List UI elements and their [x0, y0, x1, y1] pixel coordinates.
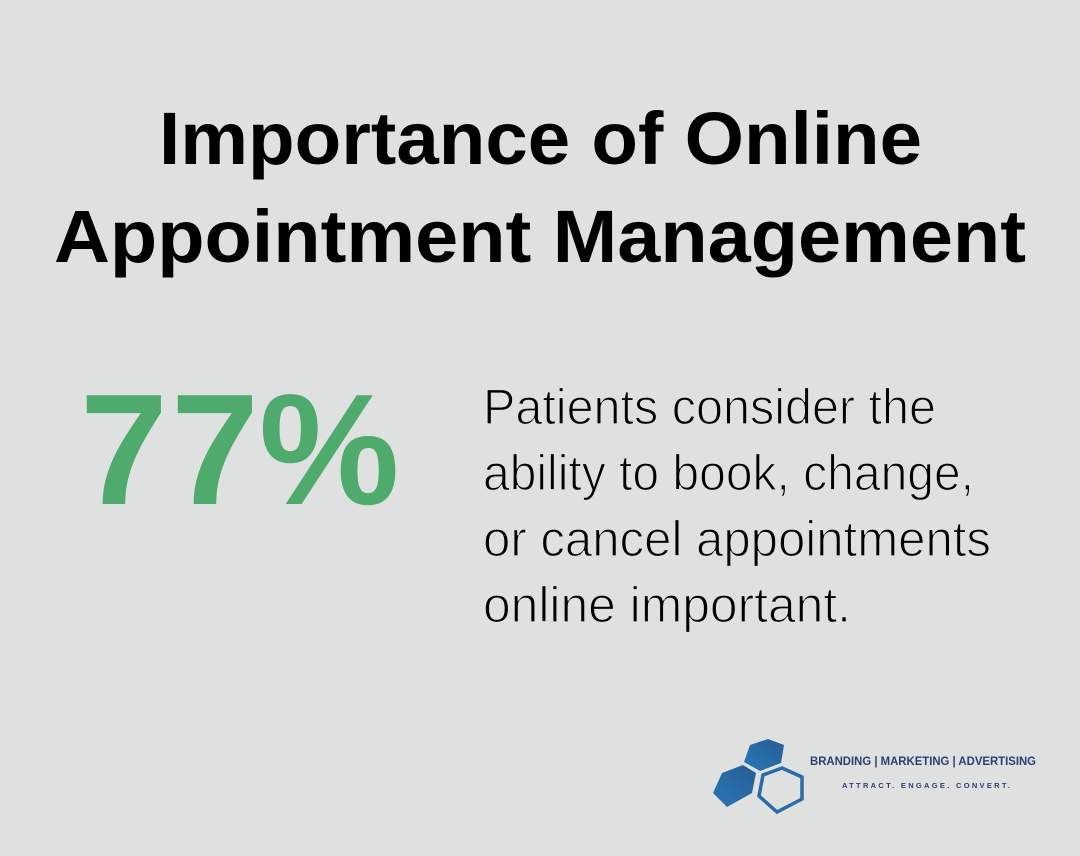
title: Appointment Management — [54, 195, 1026, 278]
description text: Patients consider the — [483, 379, 936, 435]
logo slogan: ATTRACT. ENGAGE. CONVERT. — [842, 781, 1010, 790]
title: Importance of Online — [159, 97, 922, 180]
description text: ability to book, change, — [483, 445, 974, 501]
icon: hexagons — [713, 739, 802, 812]
statistic: 77%: 77% — [80, 362, 400, 538]
logo — [713, 739, 1036, 812]
description text: or cancel appointments — [483, 511, 991, 567]
logo tagline: BRANDING | MARKETING | ADVERTISING — [810, 756, 1036, 768]
description text — [483, 379, 991, 633]
description text: online important. — [483, 577, 851, 633]
title — [54, 97, 1026, 278]
